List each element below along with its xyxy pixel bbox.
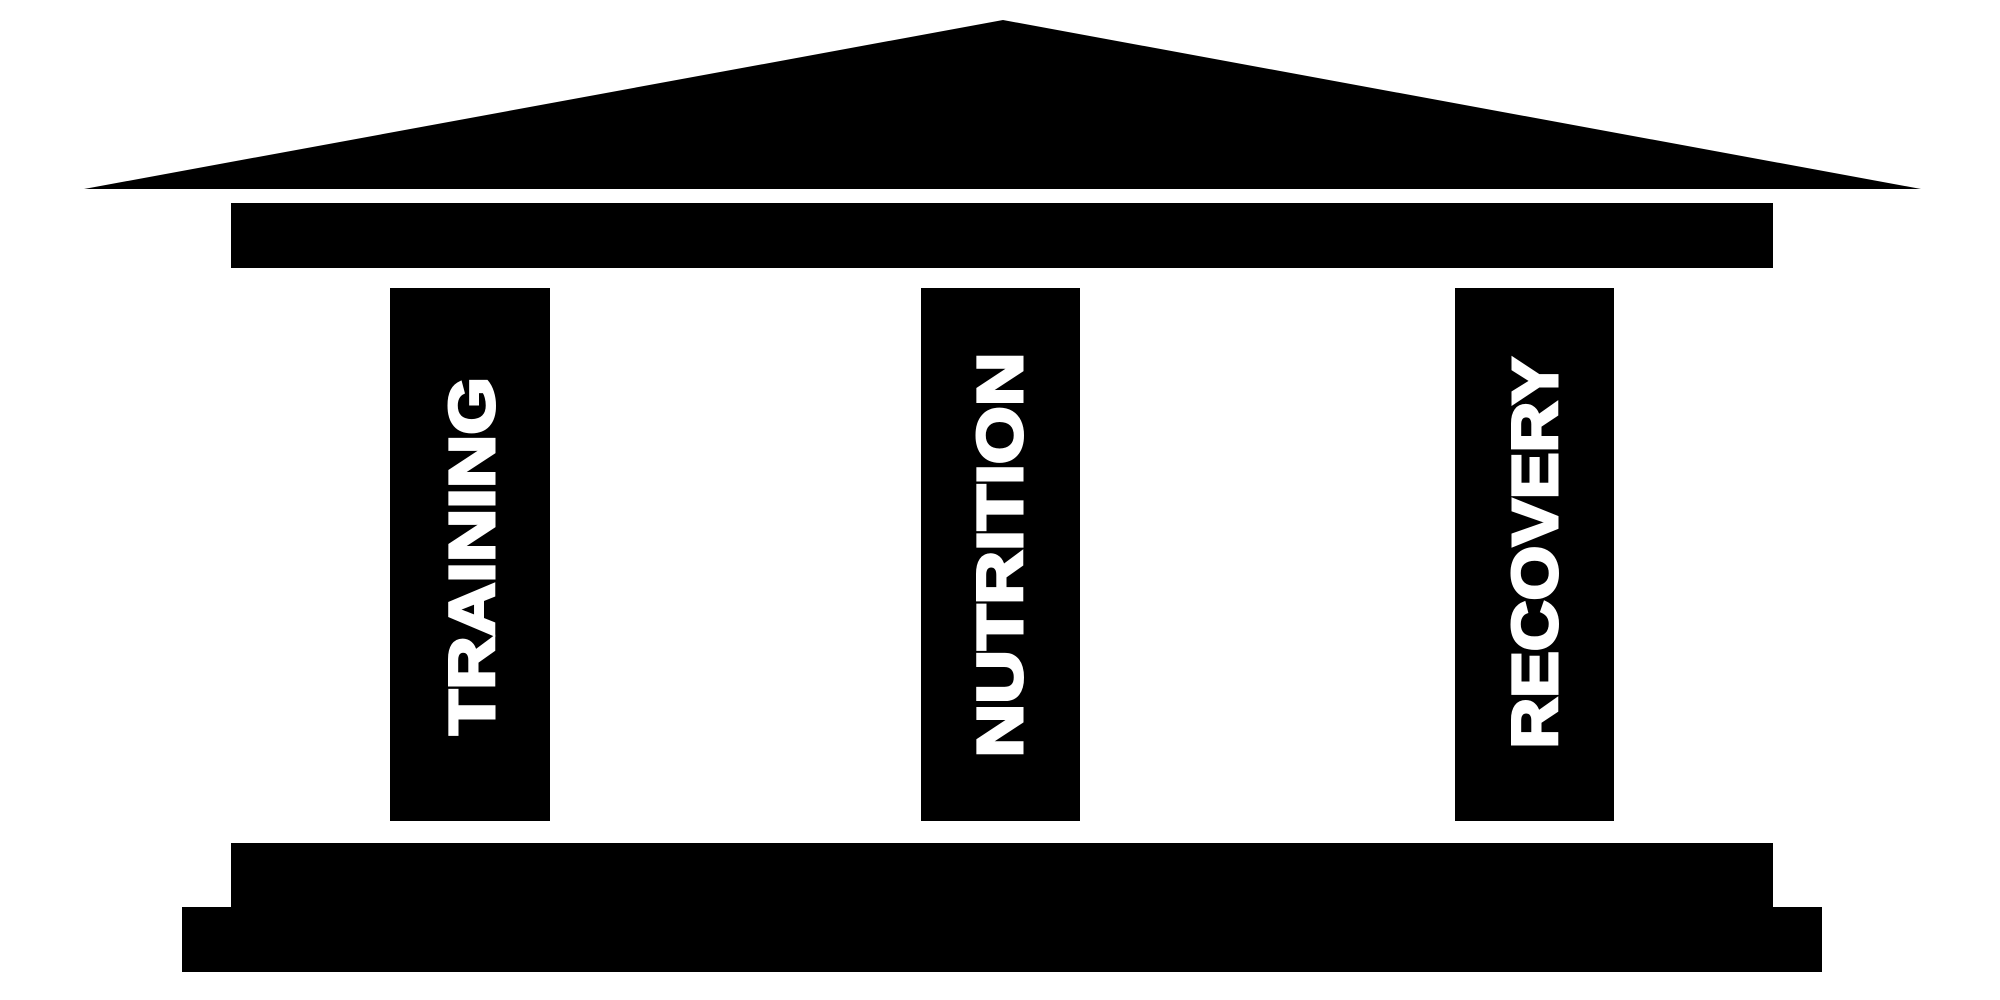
column: nutrition <box>921 288 1080 821</box>
column: recovery <box>1455 288 1614 821</box>
roof: triangular pediment <box>84 20 1921 189</box>
column: training <box>390 288 550 821</box>
label: recovery: RECOVERY <box>1499 358 1571 748</box>
base: stepped foundation <box>182 843 1822 972</box>
entablature beam <box>231 203 1773 268</box>
label: training: TRAINING <box>436 377 508 735</box>
label: nutrition: NUTRITION <box>964 352 1036 758</box>
